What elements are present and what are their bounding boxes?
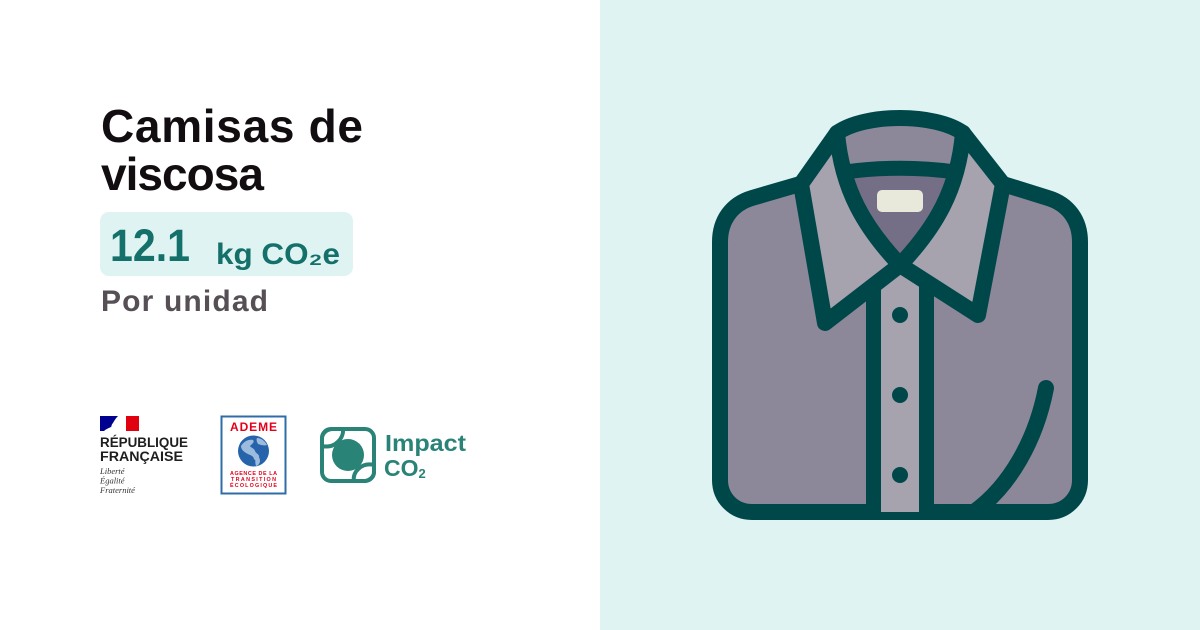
logo: République Française: RÉPUBLIQUE [100,435,188,450]
neck label [877,190,923,212]
title [101,100,363,200]
neck band [845,168,955,172]
logo: Impact CO2 [322,429,466,481]
icon: French flag [100,416,139,431]
unit label: Por unidad [101,285,268,318]
logo: ADEME [222,416,286,494]
right collar wing [900,133,1003,315]
fold curve [974,388,1046,512]
logo: ADEME: ÉCOLOGIQUE [230,481,277,489]
logo: ADEME: ADEME [230,420,277,434]
icon: globe [238,436,269,466]
shirt body [720,184,1080,512]
panel: right mint background [600,0,1200,630]
value badge: 12.1 kg CO2e [100,212,353,276]
title: Camisas de [101,100,363,152]
value badge: 12.1 kg CO2e: kg CO₂e [216,238,340,271]
logo: Impact CO2: 2 [418,466,426,481]
left collar wing [801,133,900,323]
logo: ADEME: AGENCE DE LA [230,471,277,477]
panel: left white background [0,0,600,630]
logo: République Française [99,416,188,495]
logo: République Française: Fraternité [99,485,136,495]
logo: République Française: Égalité [99,476,126,486]
value badge: 12.1 kg CO2e: 12.1 [110,220,190,271]
inner neck [845,168,955,265]
button placket [874,262,926,512]
logo: Impact CO2: CO [384,455,418,481]
collar top band [837,118,963,133]
icon: folded shirt [720,118,1080,512]
shirt buttons [892,307,908,483]
placket lines [874,285,926,512]
logo: Impact CO2: Impact [385,430,466,456]
back collar and neck opening [837,118,963,265]
logo: République Française: Liberté [99,466,126,476]
title: viscosa [101,148,264,200]
logo: République Française: FRANÇAISE [100,449,183,464]
icon: Impact CO2 mark [322,429,374,481]
logo: ADEME: TRANSITION [231,477,276,483]
